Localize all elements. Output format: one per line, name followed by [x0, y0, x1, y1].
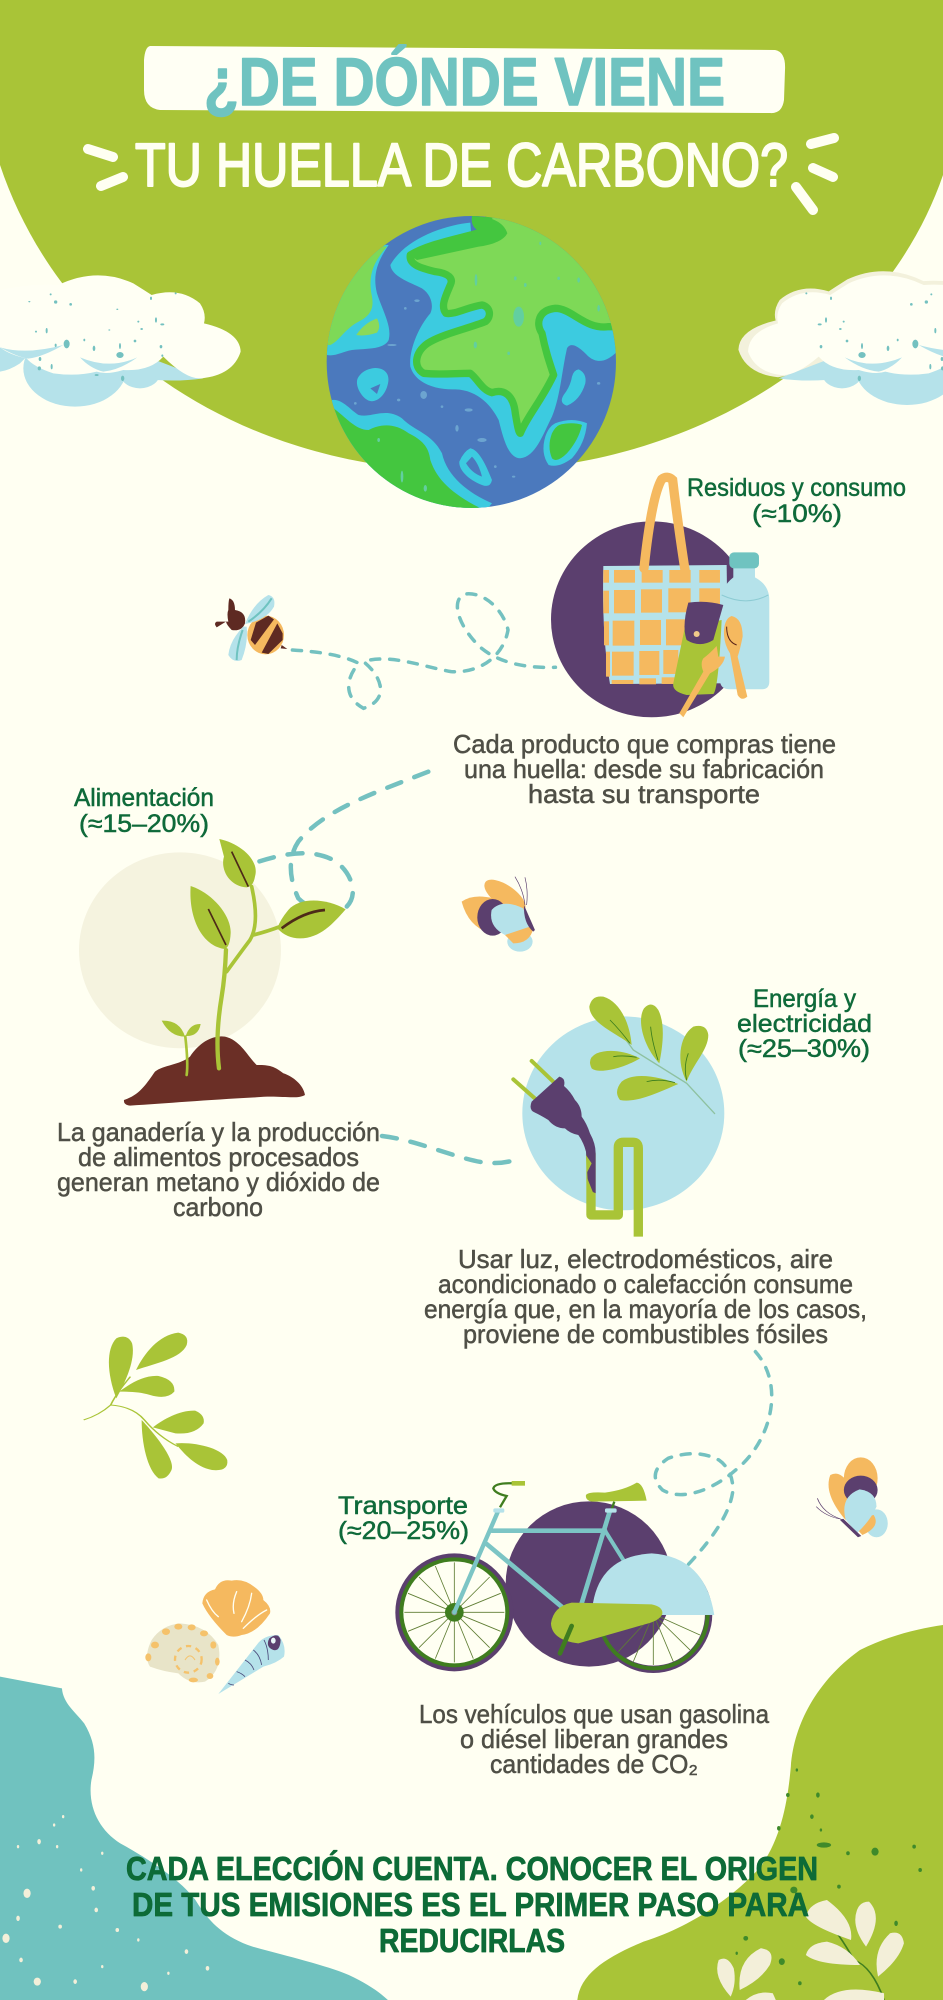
closing message: [126, 1850, 818, 1959]
closing message: REDUCIRLAS: [379, 1922, 565, 1959]
text: transporte description: [419, 1699, 769, 1779]
text: alimentacion description: carbono: [173, 1192, 263, 1222]
icon: butterfly right: [816, 1457, 888, 1537]
label: residuos: Residuos y consumo: [687, 474, 906, 502]
text: alimentacion description: La ganadería y la producción: [57, 1117, 380, 1147]
text: residuos description: una huella: desde su fabricación: [464, 754, 824, 784]
panel: residuos y consumo: [453, 474, 906, 809]
label: alimentacion: [74, 784, 214, 838]
icon: cloud left: [0, 275, 241, 407]
icon: bag, bottle and cutlery: [551, 477, 769, 717]
panel: energia: [424, 985, 872, 1349]
text: energia description: acondicionado o calefacción consume: [438, 1269, 853, 1299]
dashed trail: text to plug: [382, 1136, 522, 1163]
text: alimentacion description: de alimentos procesados: [78, 1142, 359, 1172]
top green header shape: [0, 0, 943, 472]
label: alimentacion: (≈15–20%): [79, 810, 209, 838]
icon: plug and branch: [513, 996, 724, 1237]
text: energia description: Usar luz, electrodomésticos, aire: [458, 1244, 833, 1274]
icon: bee: [215, 595, 287, 661]
text: energia description: proviene de combustibles fósiles: [463, 1319, 828, 1349]
label: energia: Energía y: [753, 985, 856, 1013]
panel: transporte: [338, 1481, 769, 1779]
dashed trail: text to bicycle: [655, 1352, 772, 1565]
text: transporte description: o diésel liberan grandes: [460, 1724, 728, 1754]
label: transporte: Transporte: [338, 1492, 468, 1520]
icon: leaf branch: [84, 1333, 227, 1479]
label: transporte: [338, 1492, 469, 1545]
label: alimentacion: Alimentación: [74, 784, 214, 812]
dashed trail: bee to bag: [292, 594, 555, 708]
icon: cloud right: [738, 271, 943, 405]
subtitle: TU HUELLA DE CARBONO?: [135, 131, 788, 199]
label: energia: (≈25–30%): [738, 1035, 870, 1063]
text: alimentacion description: [57, 1117, 380, 1222]
text: transporte description: Los vehículos que usan gasolina: [419, 1699, 769, 1729]
text: residuos description: [453, 729, 836, 809]
text: residuos description: Cada producto que compras tiene: [453, 729, 836, 759]
icon: title sparkle strokes: [88, 138, 834, 210]
title banner: ¿DE DÓNDE VIENE: [204, 44, 725, 120]
icon: butterfly: [462, 873, 535, 952]
label: residuos: (≈10%): [752, 500, 842, 528]
closing message: DE TUS EMISIONES ES EL PRIMER PASO PARA: [132, 1886, 809, 1923]
icon: earth globe: [322, 210, 625, 515]
label: residuos: [687, 474, 906, 528]
text: energia description: energía que, en la mayoría de los casos,: [424, 1294, 867, 1324]
icon: cream sprigs: [717, 1900, 904, 2000]
icon: shells: [145, 1580, 285, 1694]
text: alimentacion description: generan metano y dióxido de: [57, 1167, 380, 1197]
label: energia: [737, 985, 872, 1063]
text: residuos description: hasta su transporte: [528, 779, 760, 809]
teal blob bottom left: [0, 1677, 388, 2000]
text: energia description: [424, 1244, 867, 1349]
label: energia: electricidad: [737, 1010, 872, 1038]
green blob bottom right: [577, 1625, 943, 2000]
label: transporte: (≈20–25%): [338, 1517, 469, 1545]
closing message: CADA ELECCIÓN CUENTA. CONOCER EL ORIGEN: [126, 1850, 818, 1887]
dashed trail: text to plant: [253, 772, 428, 911]
text: transporte description: cantidades de CO₂: [490, 1749, 698, 1779]
icon: bicycle: [395, 1481, 714, 1673]
panel: alimentacion: [57, 784, 380, 1222]
icon: plant on soil: [79, 839, 346, 1106]
